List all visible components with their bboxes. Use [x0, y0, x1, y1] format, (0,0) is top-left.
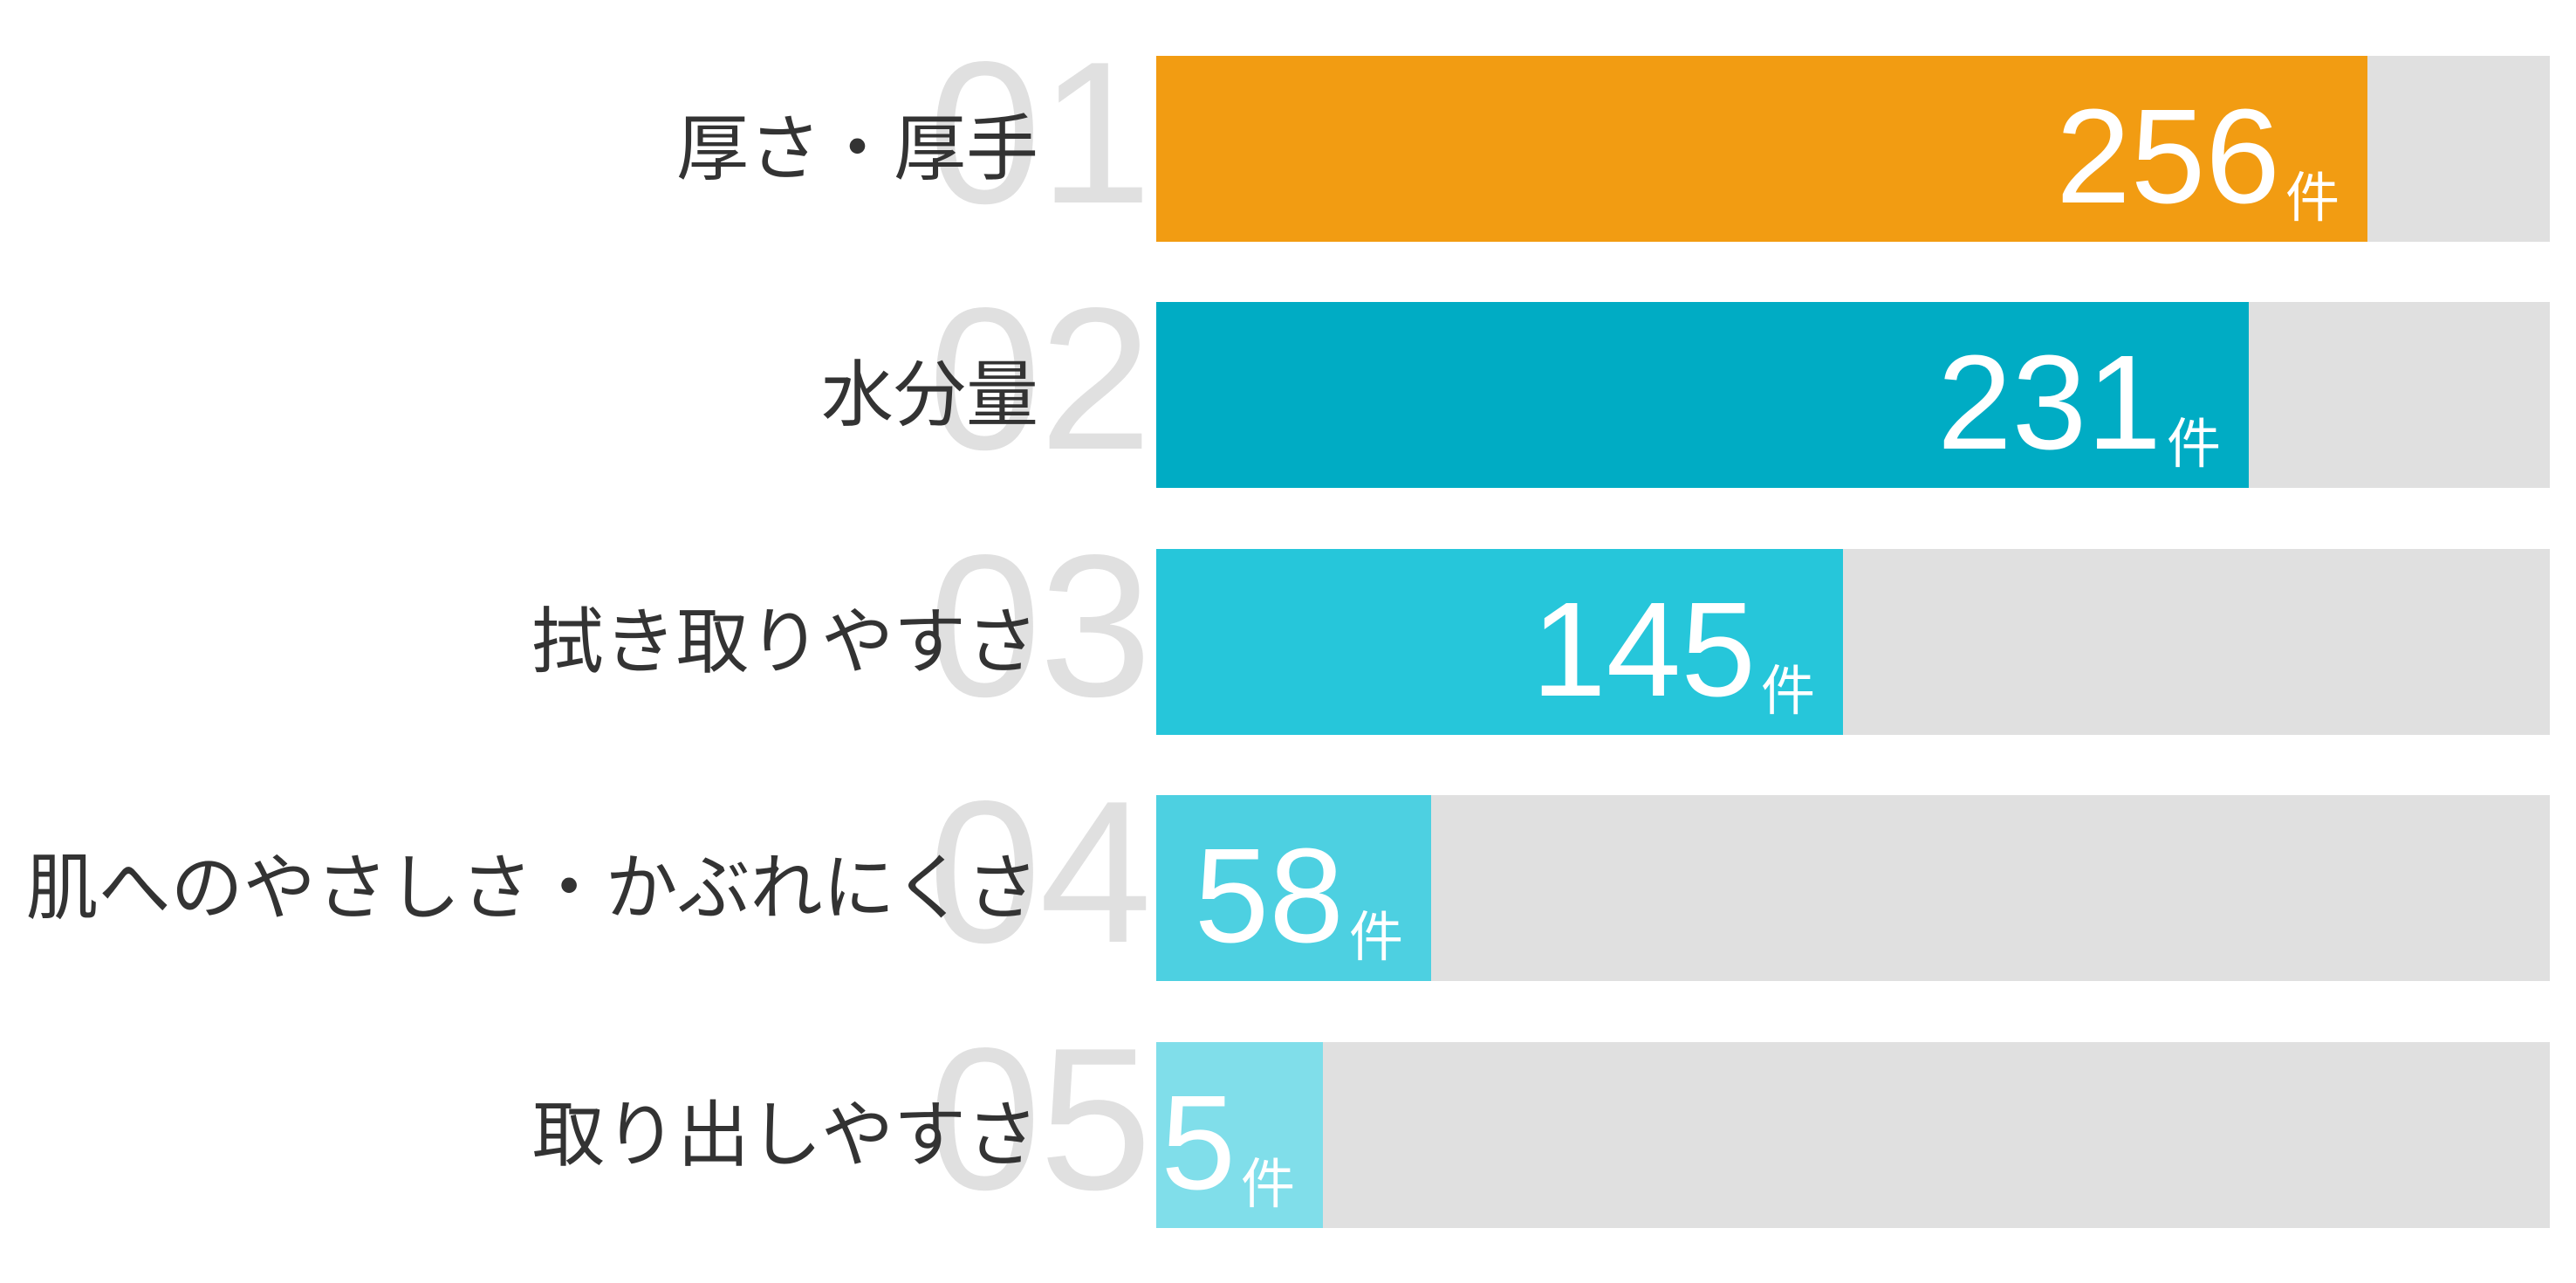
label: 水分量: [821, 336, 1038, 441]
rank number 01: 01: [928, 20, 1150, 246]
row 2: 水分量: [821, 266, 2550, 492]
row 5: 取り出しやすさ: [532, 1006, 2550, 1232]
rank number 03: 03: [928, 513, 1150, 739]
row 1: 厚さ・厚手: [676, 20, 2550, 246]
bar value 231: [1156, 302, 2249, 488]
rank number 05: 05: [928, 1006, 1150, 1232]
row 4: 肌へのやさしさ・かぶれにくさ: [26, 759, 2550, 985]
bar track: [1156, 1042, 2550, 1228]
bar track: [1156, 56, 2550, 242]
bar value 5: [1156, 1042, 1323, 1228]
bar value 256: 256件: [2056, 81, 2340, 232]
bar value 145: 145件: [1531, 574, 1815, 725]
bar value 58: 58件: [1195, 820, 1403, 971]
label: 取り出しやすさ: [532, 1076, 1038, 1181]
bar value 58: [1156, 795, 1431, 981]
rank number 04: 04: [928, 759, 1150, 985]
row 3: 拭き取りやすさ: [531, 513, 2550, 739]
bar value 5: 5件: [1161, 1067, 1295, 1218]
bar track: [1156, 549, 2550, 735]
bar value 256: [1156, 56, 2367, 242]
rank number 02: 02: [928, 266, 1150, 492]
bar track: [1156, 302, 2550, 488]
label: 肌へのやさしさ・かぶれにくさ: [26, 829, 1038, 934]
bar track: [1156, 795, 2550, 981]
label: 厚さ・厚手: [676, 90, 1038, 195]
bar value 231: 231件: [1937, 327, 2221, 478]
bar value 145: [1156, 549, 1843, 735]
label: 拭き取りやすさ: [531, 583, 1038, 688]
